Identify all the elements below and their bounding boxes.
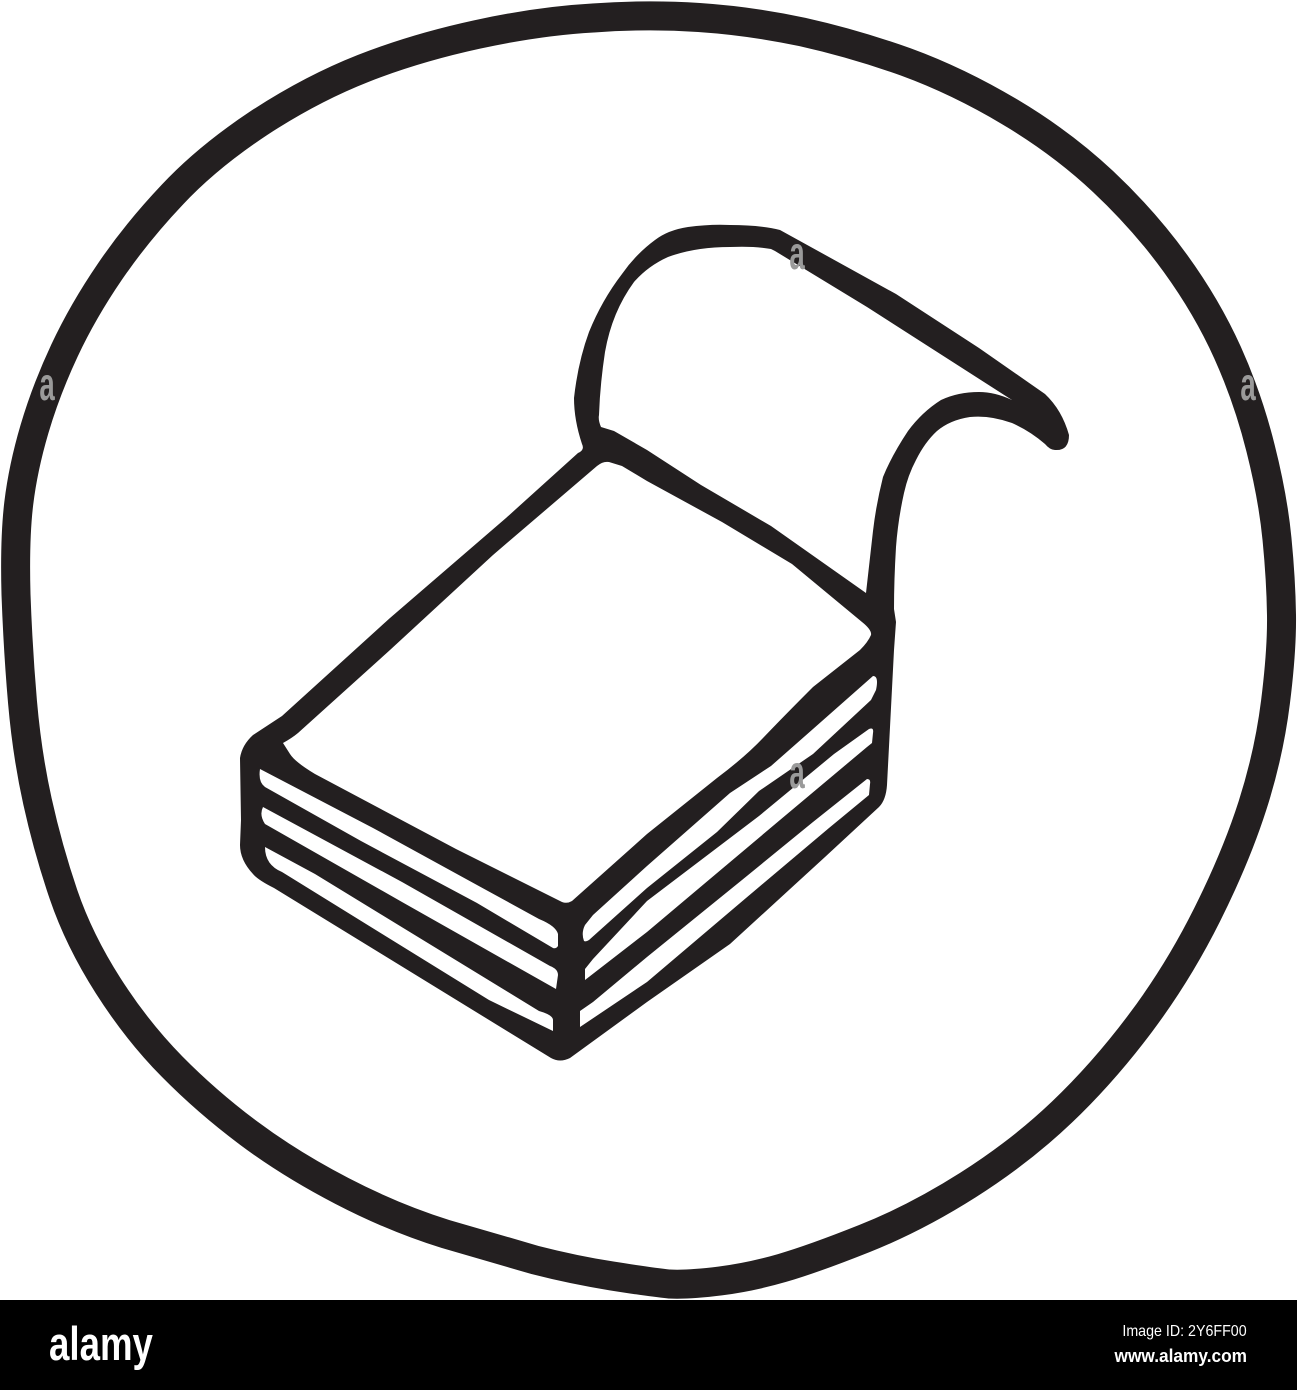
watermark letters on strokes: a [39,360,55,411]
image id: Image ID: 2Y6FF00 [1123,1323,1247,1340]
watermark letters on strokes: a [789,748,805,799]
watermark letters on strokes [39,229,1256,799]
watermark letters on strokes: a [789,229,805,280]
watermark bar [0,1300,1297,1390]
logo text: alamy [49,1317,153,1370]
site address: www.alamy.com [1114,1346,1247,1366]
paper stack and curled sheet silhouette with openings [240,225,1069,1060]
watermark letters on strokes: a [1240,360,1256,411]
